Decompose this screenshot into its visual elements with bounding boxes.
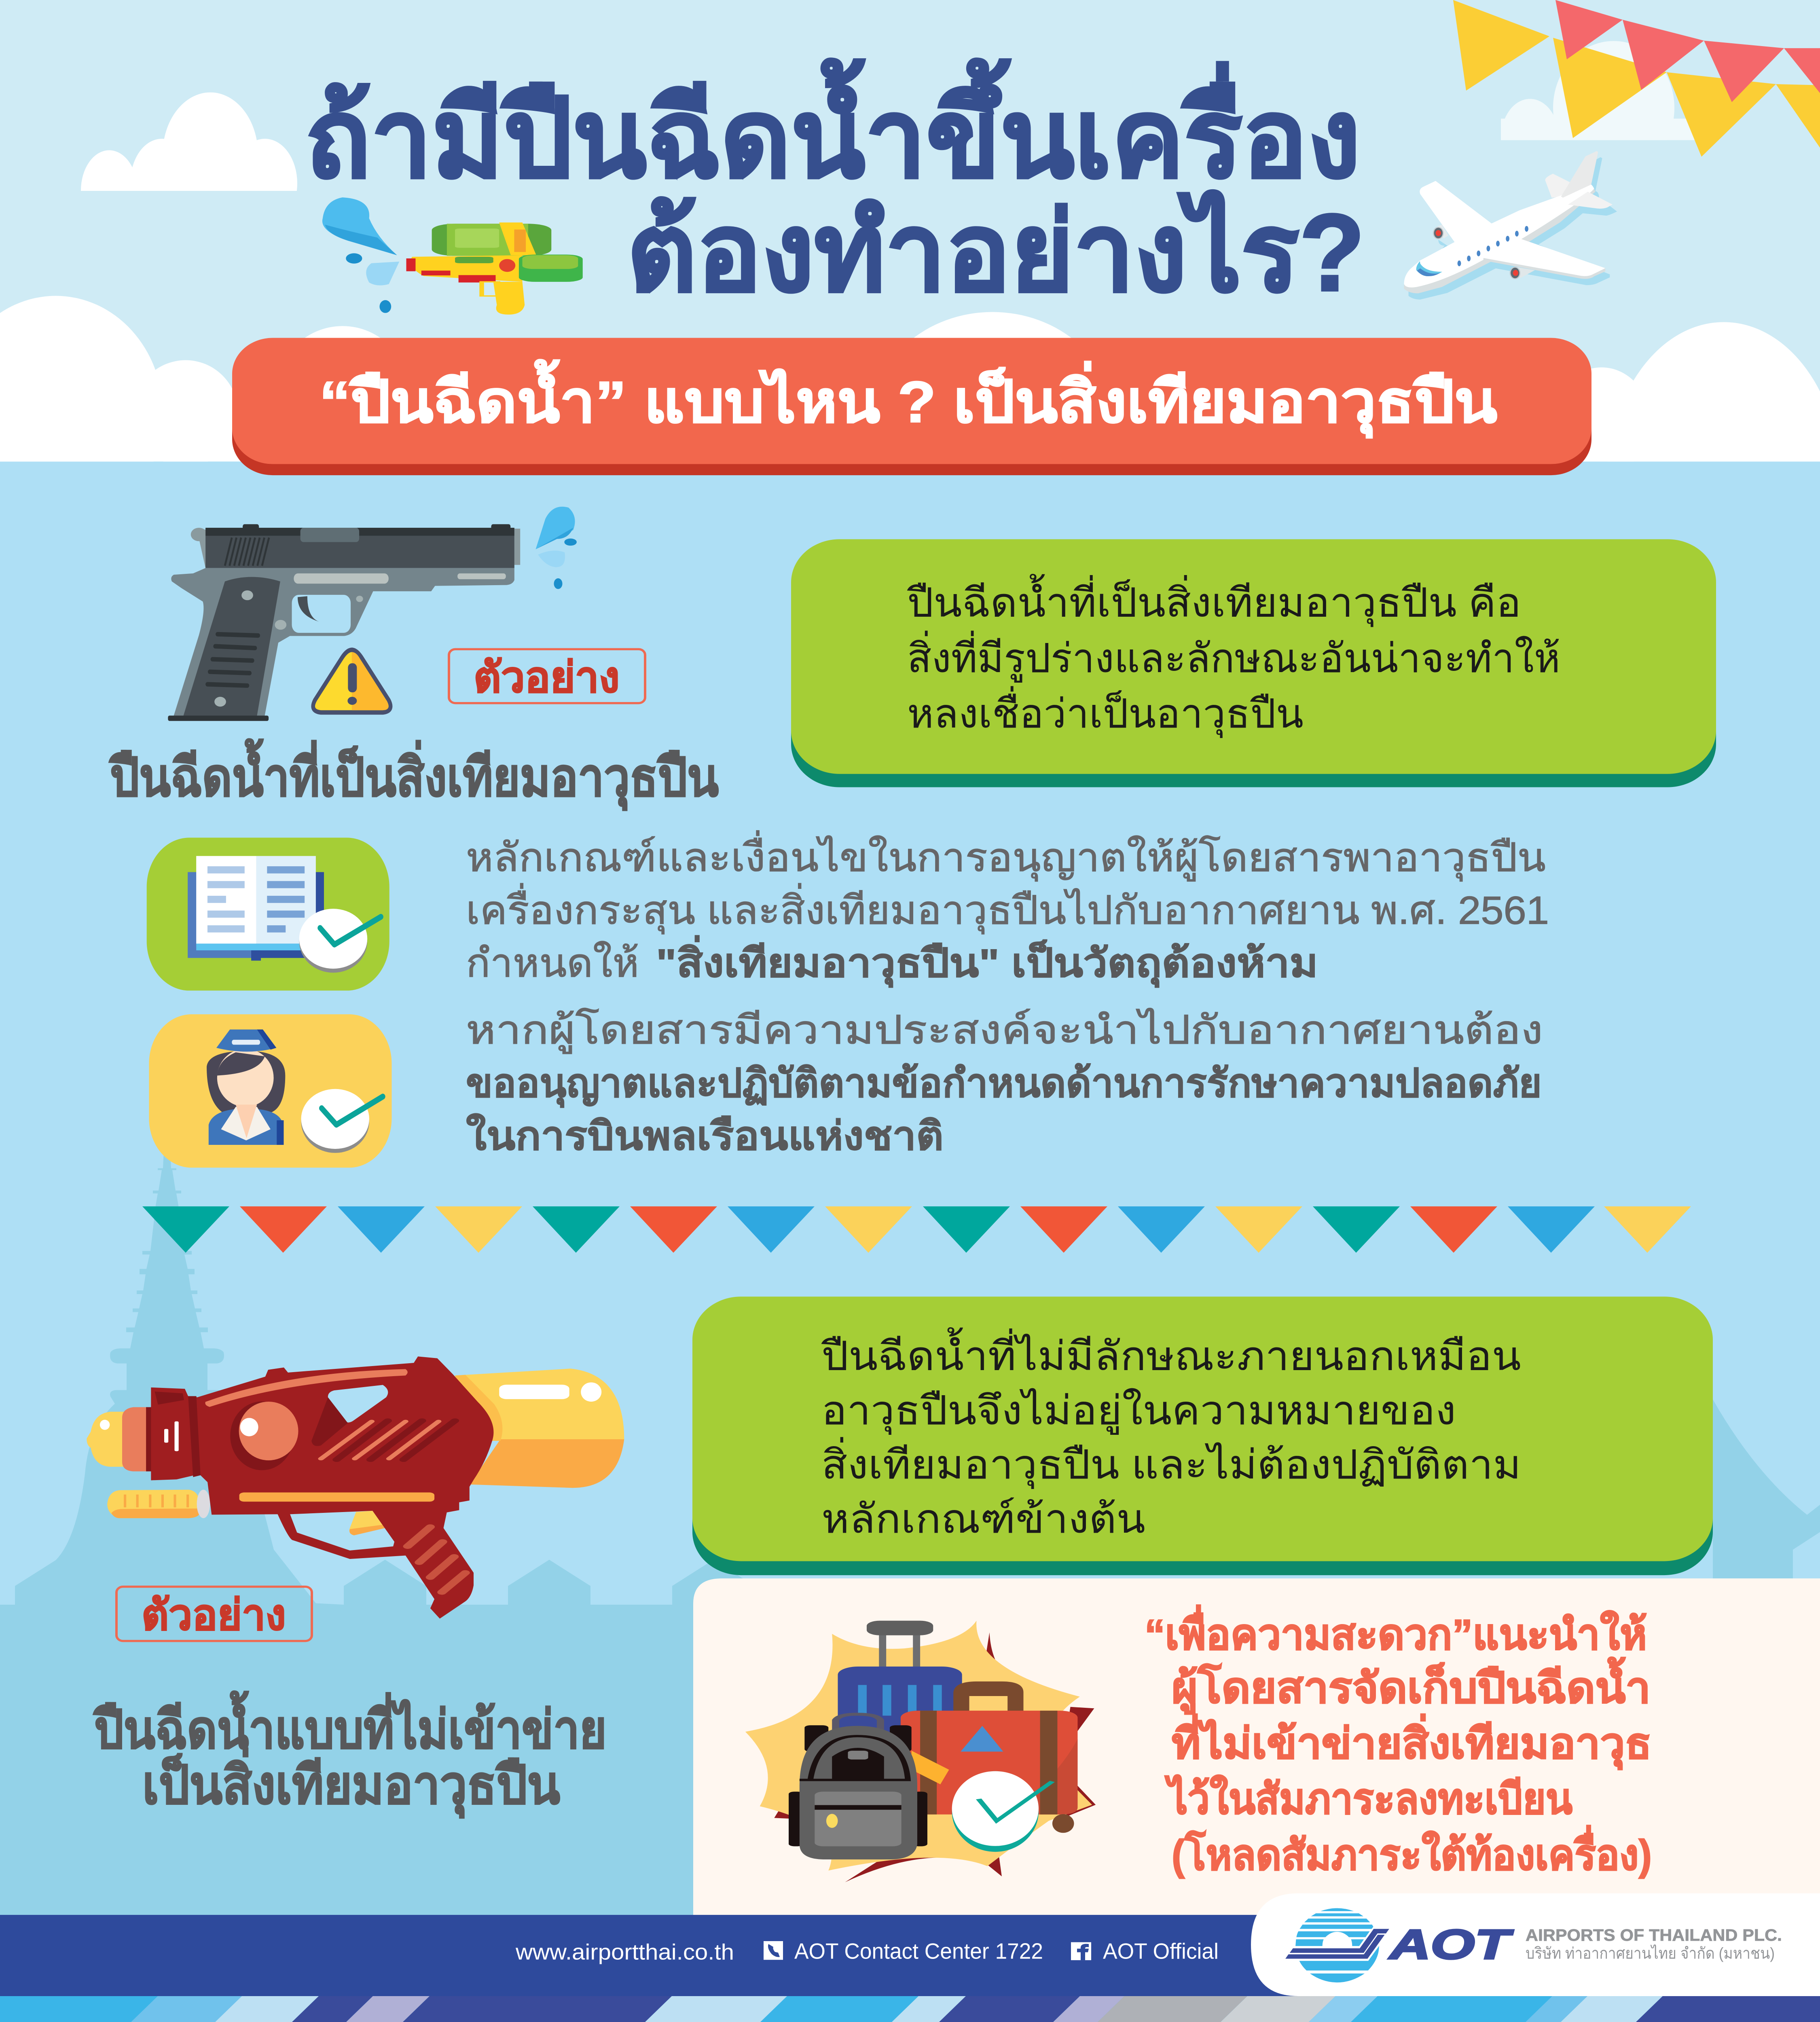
panel: subtitle banner [232, 338, 1591, 475]
footer: website: www.airportthai.co.th [515, 1940, 734, 1965]
heading: non-imitation water gun: เป็นสิ่งเทียมอาวุธปืน [142, 1747, 560, 1818]
text: regulation paragraph: เครื่องกระสุน และสิ่งเทียมอาวุธปืนไปกับอากาศยาน พ.ศ. 2561 [466, 883, 1549, 935]
icon: airplane [1404, 151, 1617, 300]
icon: water splash [535, 507, 577, 589]
icon: luggage [745, 1621, 1096, 1882]
temple silhouette [0, 1150, 1820, 1916]
text: tip: ไว้ในสัมภาระลงทะเบียน [1164, 1775, 1572, 1823]
title [305, 58, 1365, 314]
title: ต้องทำอย่างไร? [627, 189, 1365, 314]
icon: toy water gun [322, 197, 583, 315]
heading: non-imitation water gun [93, 1691, 607, 1818]
icon: flight attendant [149, 1014, 392, 1168]
text: tip: (โหลดสัมภาระใต้ท้องเครื่อง) [1172, 1825, 1652, 1879]
panel: green definition 1: สิ่งที่มีรูปร่างและลักษณะอันน่าจะทำให้ [907, 631, 1560, 683]
panel: green definition 2: อาวุธปืนจึงไม่อยู่ในความหมายของ [821, 1388, 1456, 1435]
panel: green definition 1 [791, 539, 1716, 787]
text: permission paragraph: ในการบินพลเรือนแห่งชาติ [466, 1113, 944, 1158]
text: regulation paragraph: "สิ่งเทียมอาวุธปืน" เป็นวัตถุต้องห้าม [656, 935, 1318, 988]
text: tip [1145, 1605, 1652, 1879]
sky background [0, 0, 1820, 464]
footer: facebook page: AOT Official [1103, 1939, 1219, 1964]
panel: green definition 1: หลงเชื่อว่าเป็นอาวุธปืน [907, 686, 1304, 738]
text: tip: ที่ไม่เข้าข่ายสิ่งเทียมอาวุธ [1172, 1714, 1652, 1770]
heading: imitation water gun: ปืนฉีดน้ำที่เป็นสิ่งเทียมอาวุธปืน [109, 738, 719, 811]
text: tip: “เพื่อความสะดวก”แนะนำให้ [1145, 1605, 1647, 1658]
footer: facebook icon [1071, 1942, 1091, 1960]
icon: warning sign [313, 650, 391, 713]
logo wordmark: AOT [1388, 1921, 1513, 1968]
panel: green definition 2: สิ่งเทียมอาวุธปืน และไม่ต้องปฏิบัติตาม [821, 1437, 1521, 1489]
panel: green definition 2: หลักเกณฑ์ข้างต้น [821, 1497, 1145, 1542]
sea background [0, 453, 1820, 2022]
panel: green definition 2: ปืนฉีดน้ำที่ไม่มีลักษณะภายนอกเหมือน [821, 1327, 1521, 1379]
footer stripes [0, 1996, 1820, 2022]
text: regulation paragraph: กำหนดให้ [466, 941, 639, 986]
logo mark [1285, 1908, 1389, 1982]
text: regulation paragraph: หลักเกณฑ์และเงื่อนไขในการอนุญาตให้ผู้โดยสารพาอาวุธปืน [466, 830, 1546, 882]
footer: phone icon [764, 1941, 783, 1960]
cloud: top left [81, 92, 297, 191]
text: permission paragraph [466, 1008, 1543, 1158]
footer: contact center: AOT Contact Center 1722 [794, 1939, 1043, 1964]
heading: non-imitation water gun: ปืนฉีดน้ำแบบที่ไม่เข้าข่าย [93, 1691, 607, 1760]
triangle bunting divider [142, 1206, 1691, 1253]
cloud: top right [1501, 41, 1695, 140]
icon: red water gun [87, 1356, 624, 1618]
clouds: horizon band [0, 296, 1820, 462]
icon: pistol [168, 524, 520, 721]
text: regulation paragraph [466, 830, 1549, 988]
panel: convenience tip [693, 1578, 1820, 1920]
label: example 1: ตัวอย่าง [474, 654, 620, 701]
label: example 2: ตัวอย่าง [142, 1591, 286, 1639]
logo panel [1251, 1893, 1820, 1996]
icon: rule book [147, 838, 389, 991]
text: tip: ผู้โดยสารจัดเก็บปืนฉีดน้ำ [1172, 1657, 1651, 1714]
text: permission paragraph: ขออนุญาตและปฏิบัติตามข้อกำหนดด้านการรักษาความปลอดภัย [466, 1062, 1542, 1108]
panel: green definition 2 [692, 1297, 1713, 1575]
company name: AIRPORTS OF THAILAND PLC. [1526, 1926, 1782, 1945]
panel: subtitle banner: “ปืนฉีดน้ำ” แบบไหน ? เป็นสิ่งเทียมอาวุธปืน [319, 360, 1497, 438]
bunting [1453, 0, 1820, 157]
footer bar [0, 1915, 1820, 1996]
text: permission paragraph: หากผู้โดยสารมีความประสงค์จะนำไปกับอากาศยานต้อง [466, 1008, 1543, 1054]
title: ถ้ามีปืนฉีดน้ำขึ้นเครื่อง [305, 58, 1361, 200]
panel: green definition 1: ปืนฉีดน้ำที่เป็นสิ่งเทียมอาวุธปืน คือ [907, 573, 1521, 627]
